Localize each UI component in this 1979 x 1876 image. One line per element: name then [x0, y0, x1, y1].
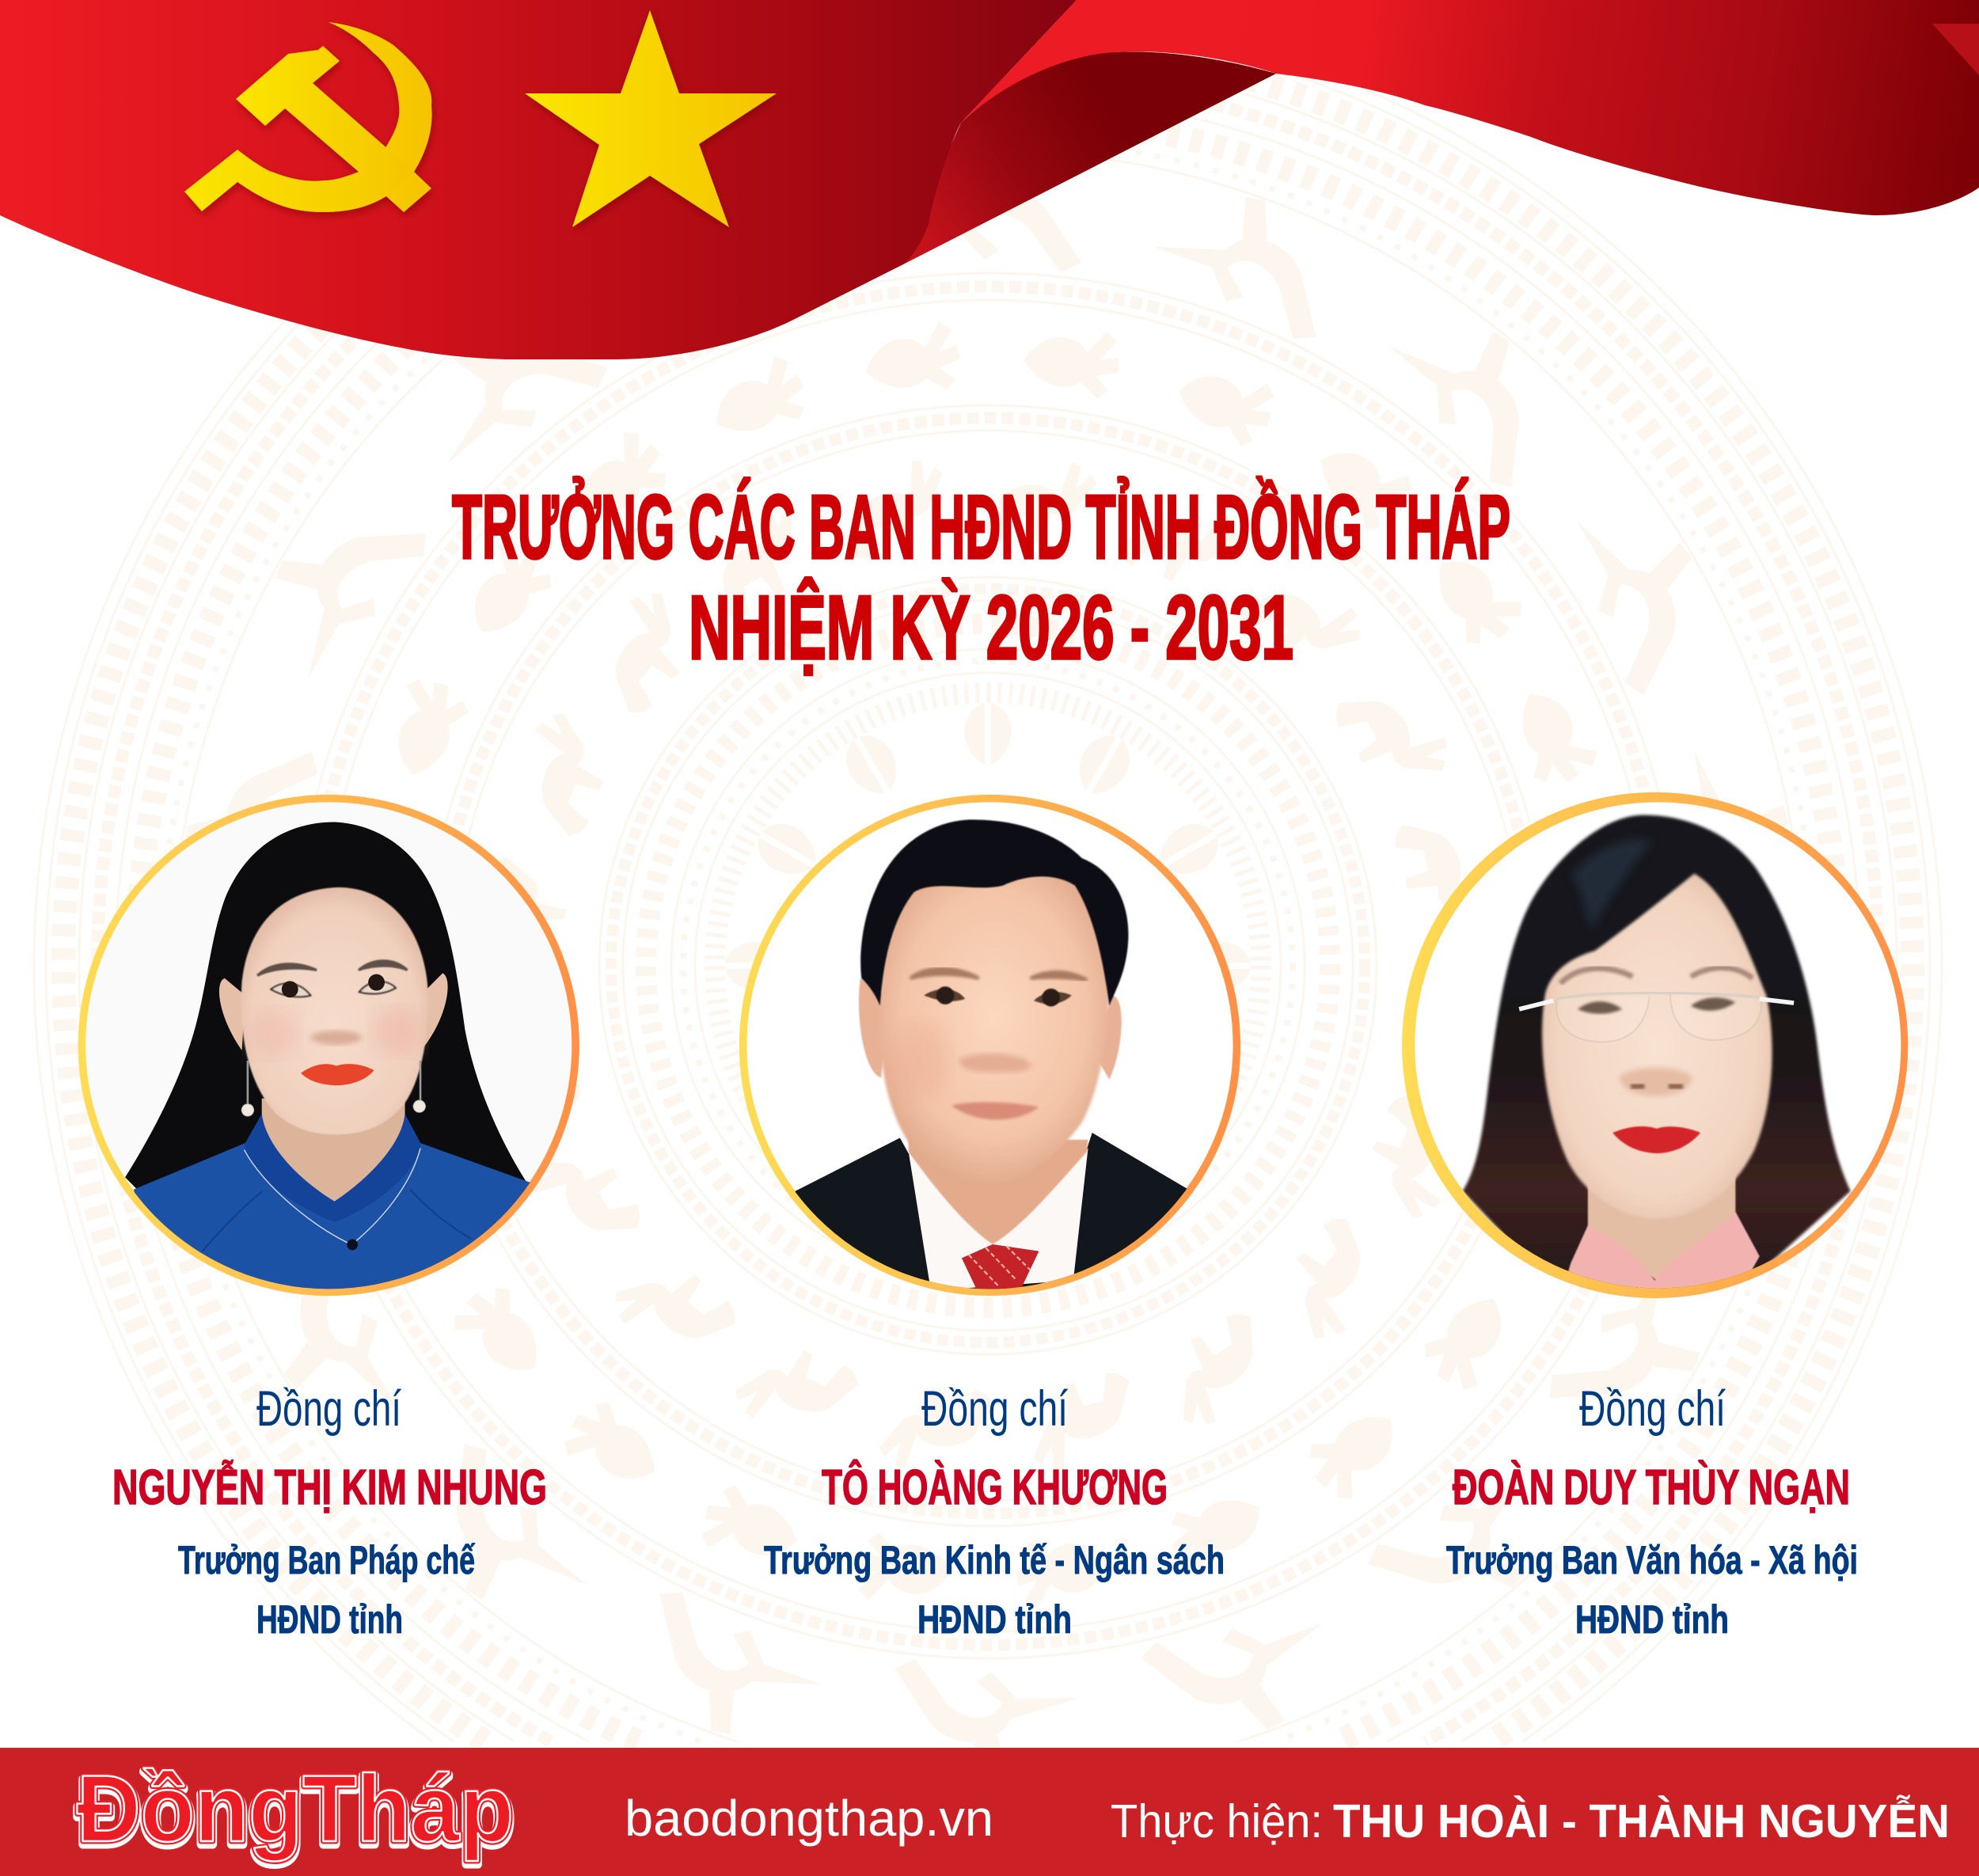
ring	[743, 799, 1236, 1292]
flag: top-right corner highlight	[1932, 24, 1979, 75]
background: bird ring	[342, 320, 1634, 1612]
salutation: Đồng chí	[256, 1381, 401, 1437]
glasses temples	[1519, 999, 1794, 1009]
glasses lens outline	[1556, 993, 1761, 1042]
council: HĐND tỉnh	[1575, 1597, 1729, 1642]
hair highlight	[1571, 839, 1653, 930]
flag: main left ribbon	[0, 0, 1077, 359]
logo: Đồng Tháp	[77, 1756, 514, 1865]
role: Trưởng Ban Văn hóa - Xã hội	[1446, 1538, 1858, 1582]
credit label: Thực hiện:	[1111, 1795, 1323, 1848]
blouse	[1557, 1212, 1760, 1312]
ring	[82, 799, 575, 1292]
face	[241, 887, 428, 1134]
cheek shading	[891, 1023, 950, 1099]
face	[879, 875, 1109, 1185]
role: Trưởng Ban Kinh tế - Ngân sách	[764, 1538, 1225, 1582]
shirt	[909, 1149, 1088, 1291]
eyebrows	[910, 969, 1087, 980]
member 1 caption	[112, 1381, 547, 1642]
flag: fold shadow	[905, 51, 1276, 264]
neck	[909, 1140, 1088, 1244]
name: TÔ HOÀNG KHƯƠNG	[822, 1460, 1168, 1515]
logo shadow: ĐồngTháp	[77, 1759, 514, 1865]
sleeve seams	[203, 1190, 472, 1251]
council: HĐND tỉnh	[256, 1597, 403, 1642]
neck	[262, 1099, 405, 1208]
nose	[310, 1031, 363, 1045]
nostrils	[1631, 1084, 1683, 1089]
member 3 caption	[1446, 1381, 1858, 1642]
eyes	[1578, 997, 1735, 1014]
title	[452, 477, 1510, 678]
background: inner leaf panels	[725, 703, 1251, 989]
logo face: ĐồngTháp	[77, 1756, 514, 1862]
pupils	[936, 986, 1060, 1006]
lips	[1612, 1126, 1700, 1153]
nose	[959, 1054, 1032, 1073]
flag: right ribbon	[961, 0, 1979, 215]
council: HĐND tỉnh	[917, 1597, 1072, 1642]
dress	[133, 1114, 530, 1289]
neck	[1588, 1171, 1735, 1281]
role: Trưởng Ban Pháp chế	[178, 1538, 475, 1582]
salutation: Đồng chí	[921, 1381, 1068, 1437]
eyes	[924, 989, 1072, 1004]
eyes	[271, 982, 396, 997]
ring	[1402, 792, 1908, 1298]
hair	[860, 819, 1128, 1006]
name: NGUYỄN THỊ KIM NHUNG	[112, 1460, 547, 1515]
icon: gold star	[525, 10, 777, 227]
tie	[962, 1244, 1039, 1291]
lips	[301, 1064, 374, 1085]
tie stripes	[969, 1246, 1031, 1287]
salutation: Đồng chí	[1579, 1381, 1726, 1437]
collar	[245, 1114, 420, 1222]
portrait 3	[1402, 792, 1908, 1312]
nose	[1619, 1068, 1692, 1097]
eyebrows	[257, 961, 408, 975]
member 2 caption	[764, 1381, 1225, 1642]
face	[1542, 874, 1772, 1218]
hammer	[236, 46, 414, 196]
right cheek	[372, 1008, 424, 1055]
pearls	[241, 1100, 426, 1116]
necklace	[245, 1149, 420, 1244]
logo red outline: ĐồngTháp	[77, 1756, 514, 1862]
credit names: THU HOÀI - THÀNH NGUYỄN	[1333, 1794, 1950, 1848]
footer bar	[0, 1748, 1979, 1876]
lips	[952, 1102, 1039, 1120]
icon: hammer and sickle	[184, 22, 432, 212]
portrait 2	[743, 799, 1236, 1325]
flag banner	[0, 0, 1979, 359]
earrings	[248, 1061, 420, 1105]
title line 2: NHIỆM KỲ 2026 - 2031	[689, 578, 1293, 678]
cheeks	[242, 1013, 294, 1055]
pupils	[282, 974, 385, 997]
hair	[1463, 815, 1851, 1291]
background: crane ring	[170, 152, 1806, 1779]
suit	[796, 1133, 1188, 1325]
eyebrows	[1560, 968, 1753, 983]
hair	[125, 822, 526, 1190]
website: baodongthap.vn	[625, 1790, 993, 1847]
glasses frame	[1557, 993, 1760, 999]
pendant	[347, 1239, 358, 1250]
ears	[859, 978, 1122, 1080]
ears	[219, 973, 448, 1050]
background: deer ring	[477, 455, 1498, 1476]
portrait 1	[82, 799, 575, 1325]
sickle	[184, 22, 432, 212]
ring inner	[1415, 802, 1901, 1289]
